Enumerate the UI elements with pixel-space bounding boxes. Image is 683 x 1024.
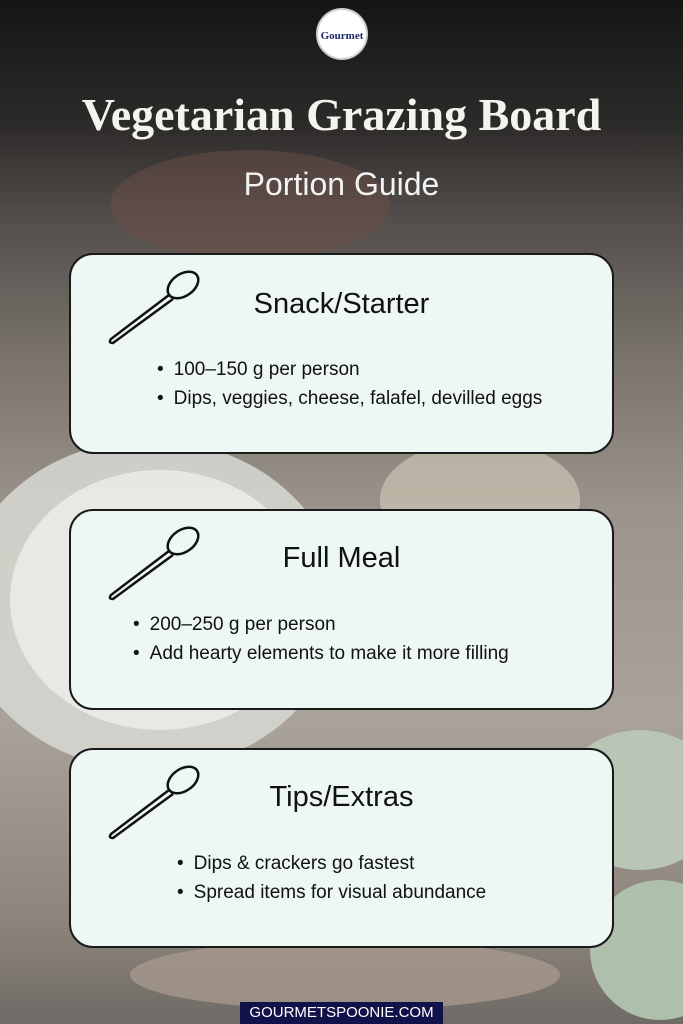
icon: spoon [108, 270, 200, 344]
subtitle: Portion Guide [244, 166, 439, 202]
panel: tips/extras [69, 748, 614, 948]
bullets: Add hearty elements to make it more filling [150, 643, 509, 664]
panel: snack/starter [69, 253, 614, 454]
bullets [158, 359, 542, 409]
logo: Gourmet [321, 30, 363, 42]
icon: spoon [108, 526, 200, 600]
footer url: GOURMETSPOONIE.COM [249, 1004, 434, 1021]
icon: spoon [108, 766, 200, 840]
title: Vegetarian Grazing Board [82, 89, 601, 140]
bullets [134, 614, 509, 664]
bullets: 200–250 g per person [150, 614, 336, 635]
heading: Tips/Extras [270, 781, 413, 813]
bullets: Dips & crackers go fastest [194, 853, 414, 874]
heading: Snack/Starter [254, 288, 429, 320]
bullets [178, 853, 486, 903]
bullets: 100–150 g per person [174, 359, 360, 380]
panel: full meal [69, 509, 614, 710]
logo [316, 8, 368, 60]
heading: Full Meal [283, 542, 400, 574]
bullets: Dips, veggies, cheese, falafel, devilled eggs [174, 388, 542, 409]
bullets: Spread items for visual abundance [194, 882, 486, 903]
